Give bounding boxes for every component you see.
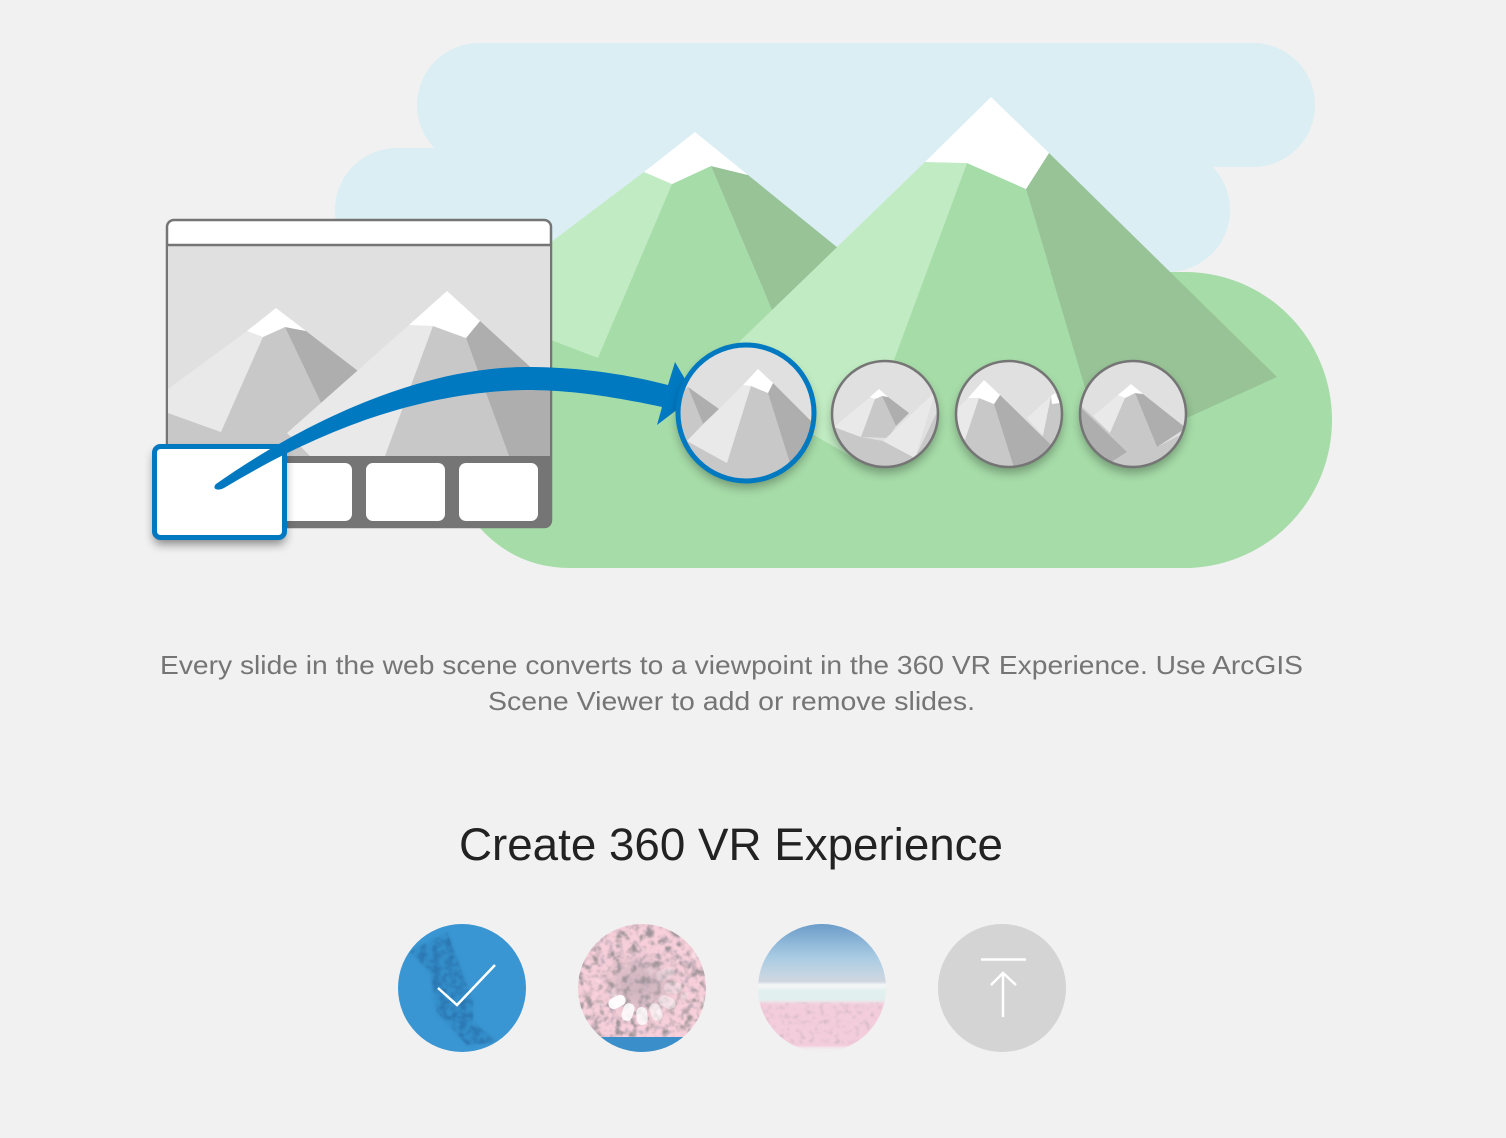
sky cloud shape: [335, 43, 1315, 272]
viewpoint circles: [670, 345, 1190, 500]
scene mountains: [168, 291, 550, 456]
icon: check mark: [438, 965, 495, 1005]
viewpoint circle 3: [950, 361, 1070, 480]
viewpoint circle 4: [1075, 361, 1190, 480]
window frame and title bar: [167, 220, 551, 527]
left mountain: [530, 132, 838, 358]
heading: Create 360 VR Experience: [459, 819, 1003, 870]
progress steps: [398, 924, 1066, 1062]
icon: loading spinner: [606, 965, 682, 1025]
blue arrow from slide to viewpoint: [214, 362, 695, 490]
selected slide thumbnail: [154, 446, 285, 544]
description text: Every slide in the web scene converts to a viewpoint in the 360 VR Experience. Use ArcGIS: [160, 650, 1303, 680]
large right mountain: [707, 97, 1277, 460]
step 1: completed: [398, 924, 526, 1052]
green ground: [400, 272, 1332, 568]
viewpoint circle 2: [825, 361, 945, 480]
step 2: in progress: [578, 924, 706, 1053]
landscape illustration background: [335, 43, 1332, 568]
slide thumbnail strip: [166, 456, 552, 528]
scene view: [168, 246, 550, 457]
step 3: scene preview: [758, 924, 886, 1052]
description text: Scene Viewer to add or remove slides.: [488, 686, 975, 716]
description text: [160, 650, 1303, 716]
icon: upload arrow: [981, 960, 1026, 1017]
web scene window: [154, 220, 552, 544]
selected viewpoint circle: [670, 345, 820, 500]
infographic canvas: [147, 43, 1332, 1052]
step 4: upload: [938, 924, 1066, 1052]
